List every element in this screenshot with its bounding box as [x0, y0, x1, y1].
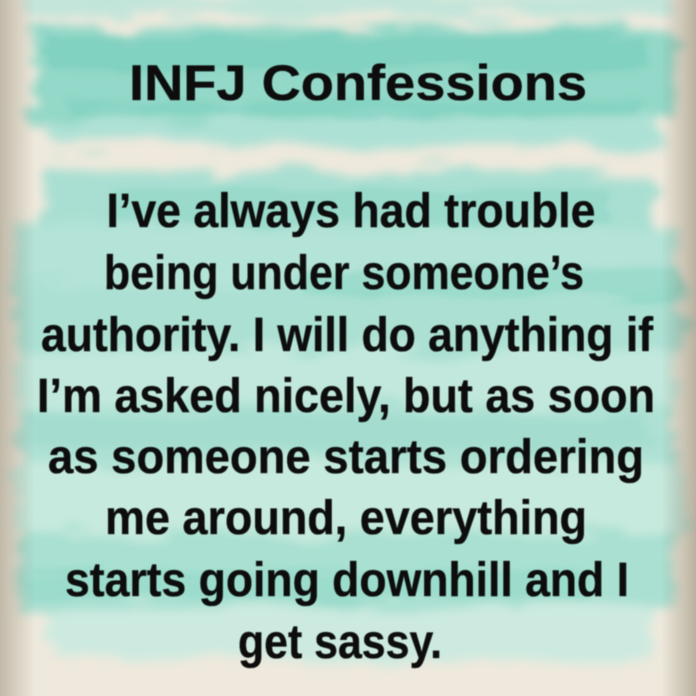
body text: authority. I will do anything if	[41, 309, 654, 362]
body text: as someone starts ordering	[48, 431, 644, 484]
body text: get sassy.	[238, 616, 442, 669]
body text	[37, 185, 655, 669]
title: INFJ Confessions	[129, 55, 587, 111]
body text: me around, everything	[105, 492, 587, 545]
body text: being under someone’s	[104, 247, 584, 300]
text content	[37, 55, 655, 669]
body text: I’m asked nicely, but as soon	[37, 370, 655, 423]
body text: I’ve always had trouble	[106, 185, 596, 238]
body text: starts going downhill and I	[65, 554, 629, 607]
